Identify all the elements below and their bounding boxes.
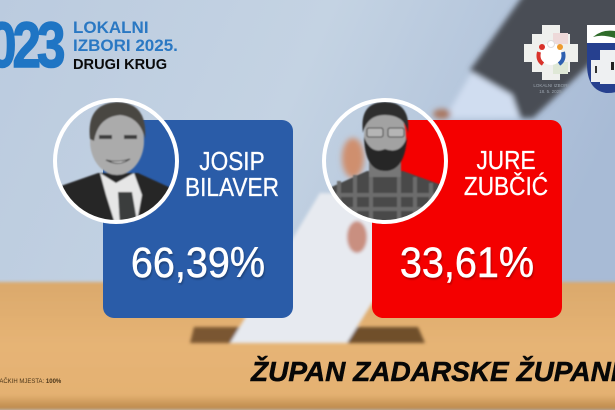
portrait: Josip Bilaver [53,98,179,224]
text: candidate name Josip Bilaver: JOSIP [199,146,265,176]
panel: Jure Zubčić [372,120,562,318]
text: result 33,61%: 33,61% [400,239,534,287]
text: result 66,39%: 66,39% [131,239,265,287]
text: candidate name Josip Bilaver [185,146,279,202]
heading: election title: IZBORI 2025. [73,36,178,55]
icon: election emblem [524,25,578,94]
icon: election emblem: 18. 5. 2025. [539,89,563,94]
text: candidate name Jure Zubčić: JURE [476,145,536,175]
text: candidate name Jure Zubčić: ZUBČIĆ [464,171,548,201]
heading: election title: LOKALNI [73,18,149,37]
portrait: Jure Zubčić [322,98,448,224]
icon: county coat of arms [587,25,615,93]
text: candidate name Josip Bilaver: BILAVER [185,172,279,202]
text: candidate name Jure Zubčić [464,145,548,201]
heading: election title [73,18,178,73]
icon: election emblem: LOKALNI IZBORI [533,83,569,88]
panel: Josip Bilaver [103,120,293,318]
heading: election title: DRUGI KRUG [73,57,167,73]
